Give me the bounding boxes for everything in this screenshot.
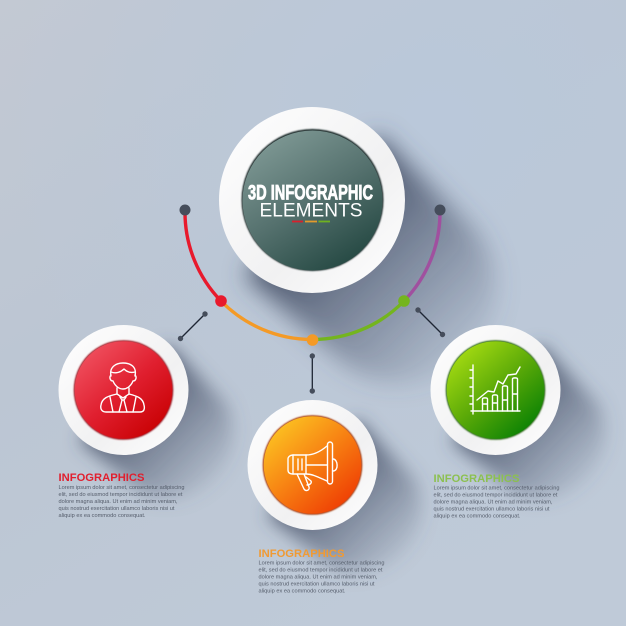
icon: growth chart [470, 365, 520, 414]
icon: businessman [101, 363, 144, 412]
arc nodes [180, 204, 446, 346]
left circle [58, 325, 188, 455]
text block: right: Lorem ipsum dolor sit amet, consectetur adipiscing [434, 486, 560, 492]
connector arc [185, 212, 440, 340]
colour dashes [292, 220, 330, 222]
text block: right: aliquip ex ea commodo consequat. [434, 514, 521, 520]
text block: right: dolore magna aliqua. Ut enim ad minim veniam, [434, 500, 553, 506]
arc segment: red [185, 212, 221, 301]
text block: right: INFOGRAPHICS [434, 473, 520, 485]
text block: left: Lorem ipsum dolor sit amet, consectetur adipiscing [58, 485, 184, 491]
arc segment: purple [404, 212, 440, 301]
main circle [219, 107, 405, 293]
text block: left: elit, sed do eiusmod tempor incididunt ut labore et [58, 492, 183, 498]
drop shadows [80, 135, 605, 573]
text block: middle: dolore magna aliqua. Ut enim ad minim veniam, [258, 574, 378, 580]
subtitle: ELEMENTS [260, 200, 362, 222]
title: 3D INFOGRAPHIC [248, 181, 373, 204]
text block: right [434, 473, 560, 520]
middle circle [248, 400, 378, 530]
text block: middle: INFOGRAPHICS [258, 548, 344, 560]
right circle [430, 325, 560, 455]
text block: left: aliquip ex ea commodo consequat. [58, 513, 146, 519]
arc segment: green [312, 301, 404, 340]
text block: middle: aliquip ex ea commodo consequat. [258, 588, 346, 594]
text block: right: quis nostrud exercitation ullamco laboris nisi ut [434, 506, 550, 512]
text block: left: quis nostrud exercitation ullamco laboris nisi ut [58, 506, 175, 512]
text block: middle: quis nostrud exercitation ullamco laboris nisi ut [258, 582, 375, 588]
text block: middle [258, 548, 384, 594]
text block: left: dolore magna aliqua. Ut enim ad minim veniam, [58, 499, 178, 505]
text block: right: elit, sed do eiusmod tempor incididunt ut labore et [434, 492, 558, 498]
icon: megaphone [288, 442, 337, 490]
text block: middle: elit, sed do eiusmod tempor incididunt ut labore et [258, 568, 383, 574]
text block: middle: Lorem ipsum dolor sit amet, consectetur adipiscing [258, 560, 384, 566]
pointer: right [415, 307, 445, 337]
pointer: left [178, 311, 208, 341]
text block: left [58, 472, 184, 519]
arc segment: orange [221, 301, 312, 340]
pointer: middle [310, 353, 315, 394]
text block: left: INFOGRAPHICS [58, 472, 144, 484]
